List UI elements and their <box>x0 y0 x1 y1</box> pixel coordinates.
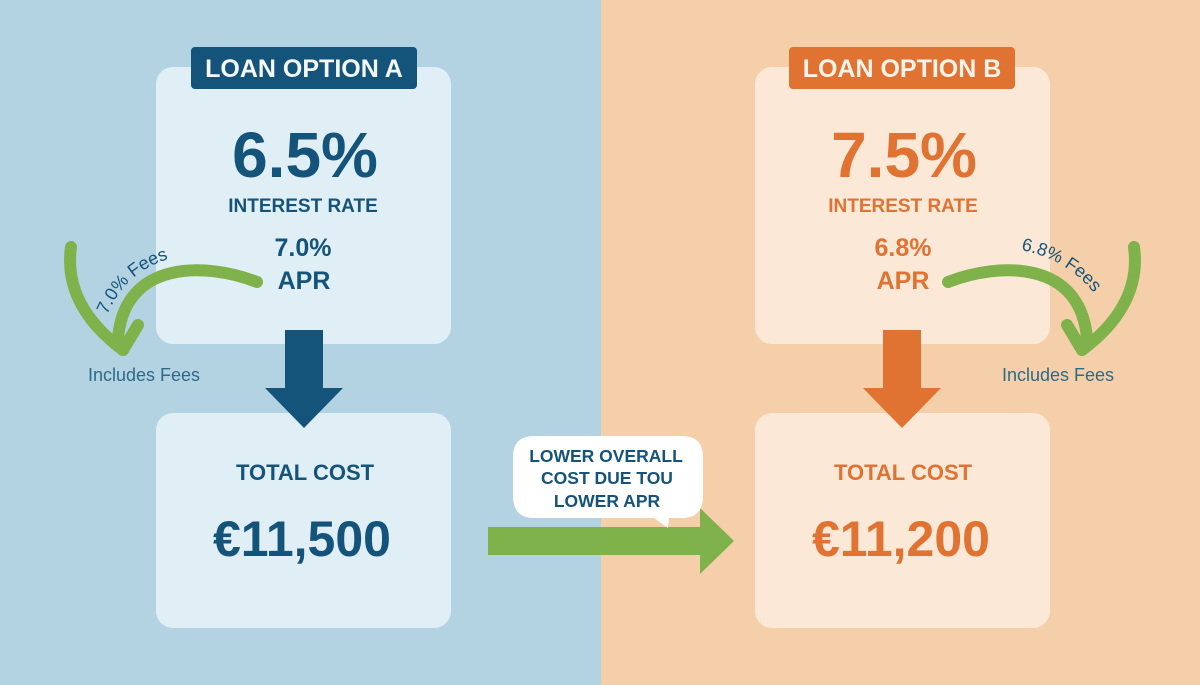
panel: option A rates card <box>156 47 451 344</box>
panel: option A total cost card <box>156 413 451 628</box>
interest rate B label: INTEREST RATE <box>828 196 978 217</box>
label: includes fees A: Includes Fees <box>88 365 200 385</box>
interest rate B value: 7.5% <box>831 119 977 191</box>
total cost A value: €11,500 <box>213 511 391 567</box>
arrow: down A <box>265 330 343 428</box>
total cost B value: €11,200 <box>812 511 990 567</box>
arrow: fees curve B <box>948 247 1135 350</box>
total cost B label: TOTAL COST <box>834 460 973 485</box>
callout: lower overall cost <box>513 436 703 528</box>
APR A value: 7.0% <box>275 234 331 262</box>
APR B value: 6.8% <box>875 234 931 262</box>
APR B label: APR <box>877 267 929 295</box>
panel: option B background <box>601 0 1200 685</box>
callout: lower overall cost: LOWER APR <box>554 491 661 511</box>
heading: loan option B: LOAN OPTION B <box>803 55 1001 83</box>
arrow: fees curve A <box>70 247 257 350</box>
label: includes fees B: Includes Fees <box>1002 365 1114 385</box>
total cost A label: TOTAL COST <box>236 460 375 485</box>
heading: loan option A: LOAN OPTION A <box>205 55 403 83</box>
interest rate A label: INTEREST RATE <box>228 196 378 217</box>
arrow: comparison A to B <box>488 508 734 574</box>
label: 7.0% fees: 7.0% Fees <box>96 250 168 312</box>
arrow: down B <box>863 330 941 428</box>
panel: option B rates card <box>755 47 1050 344</box>
APR A label: APR <box>278 267 330 295</box>
panel: option A background <box>0 0 601 685</box>
label: 6.8% fees: 6.8% Fees <box>1022 238 1100 292</box>
heading: loan option A <box>191 47 417 89</box>
panel: option B total cost card <box>755 413 1050 628</box>
callout: lower overall cost: LOWER OVERALL <box>529 446 683 466</box>
heading: loan option B <box>789 47 1015 89</box>
callout: lower overall cost: COST DUE TOU <box>541 468 673 488</box>
interest rate A value: 6.5% <box>232 119 378 191</box>
